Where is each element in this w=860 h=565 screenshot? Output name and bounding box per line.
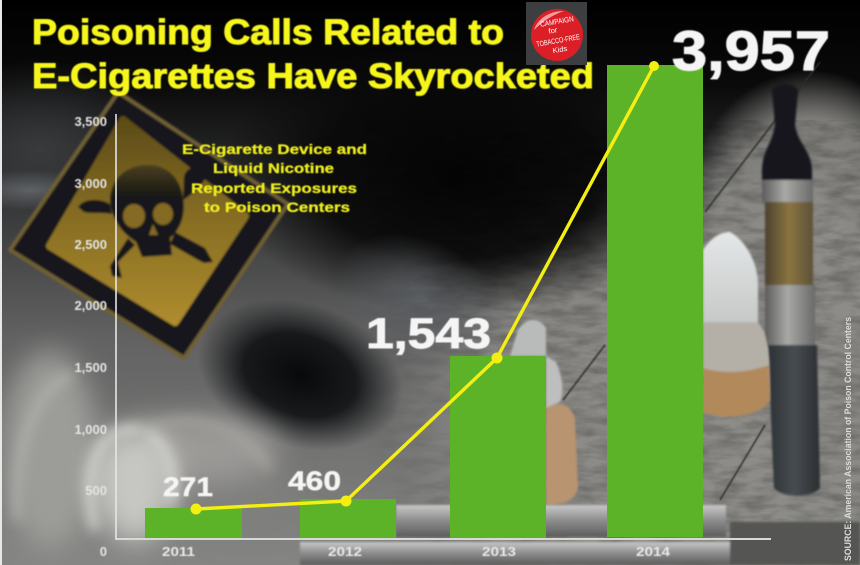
skull: [110, 165, 183, 200]
logo: Campaign for Tobacco-Free Kids: [526, 2, 587, 65]
wood plank lines: [563, 62, 820, 500]
y axis labels: 1,500: [74, 360, 107, 375]
glass tank: [765, 202, 813, 287]
icon: hazard sign with skull and crossbones: [10, 92, 288, 358]
logo: Campaign for Tobacco-Free Kids: Kids: [552, 44, 568, 55]
chart subtitle: Reported Exposures: [191, 180, 357, 196]
bar: 2013: [450, 356, 546, 538]
x axis year labels: [162, 544, 671, 559]
chart subtitle: Liquid Nicotine: [213, 160, 334, 176]
metal tube device along the bottom: [300, 505, 860, 565]
value labels: 3,957: [672, 19, 830, 82]
chart subtitle: to Poison Centers: [204, 199, 350, 215]
y axis labels: 3,500: [74, 114, 107, 129]
logo: Campaign for Tobacco-Free Kids: TOBACCO-FREE: [536, 32, 581, 49]
y axis labels: 3,000: [74, 176, 107, 191]
battery: [768, 345, 820, 496]
value labels: 271: [163, 472, 213, 502]
dark smoke void: [178, 274, 422, 476]
x axis year labels: 2011: [162, 544, 195, 559]
chart subtitle: E-Cigarette Device and: [182, 141, 367, 157]
metal connector: [765, 285, 815, 347]
x axis year labels: 2012: [328, 544, 362, 559]
value labels: 460: [288, 466, 341, 496]
title: E-Cigarettes Have Skyrocketed: [32, 57, 594, 96]
bright smoke wisps: [17, 375, 270, 530]
pale smoke swirl: [2, 350, 305, 550]
title: [32, 13, 594, 96]
refill bottle, centre: [510, 320, 578, 505]
logo: Campaign for Tobacco-Free Kids: CAMPAIGN: [539, 14, 574, 29]
refill bottle, right: [703, 232, 770, 416]
bar chart: [145, 65, 703, 538]
bar: 2014: [607, 65, 703, 537]
y axis and x axis: [116, 114, 771, 540]
bar: 2011: [145, 508, 242, 538]
e-cigarette device: [762, 84, 820, 496]
value labels: [163, 19, 830, 502]
trend line with markers: [190, 61, 659, 514]
x axis year labels: 2014: [636, 544, 671, 559]
title: Poisoning Calls Related to: [32, 13, 504, 52]
logo: Campaign for Tobacco-Free Kids: for: [548, 25, 558, 36]
left edge strip: [0, 0, 2, 565]
chart subtitle: [182, 141, 367, 215]
metal collar: [762, 180, 813, 202]
y axis labels: 2,500: [74, 237, 107, 252]
y axis labels: 0: [100, 544, 107, 559]
mouthpiece: [762, 84, 812, 190]
source credit: SOURCE: American Association of Poison Control Centers: [843, 317, 853, 561]
x axis year labels: 2013: [482, 544, 516, 559]
y axis labels: 2,000: [74, 298, 107, 313]
wood grain texture: [410, 120, 860, 565]
bar: 2012: [300, 499, 396, 538]
y axis labels: 500: [85, 483, 107, 498]
y axis labels: [74, 114, 107, 559]
y axis labels: 1,000: [74, 422, 107, 437]
value labels: 1,543: [366, 310, 491, 358]
